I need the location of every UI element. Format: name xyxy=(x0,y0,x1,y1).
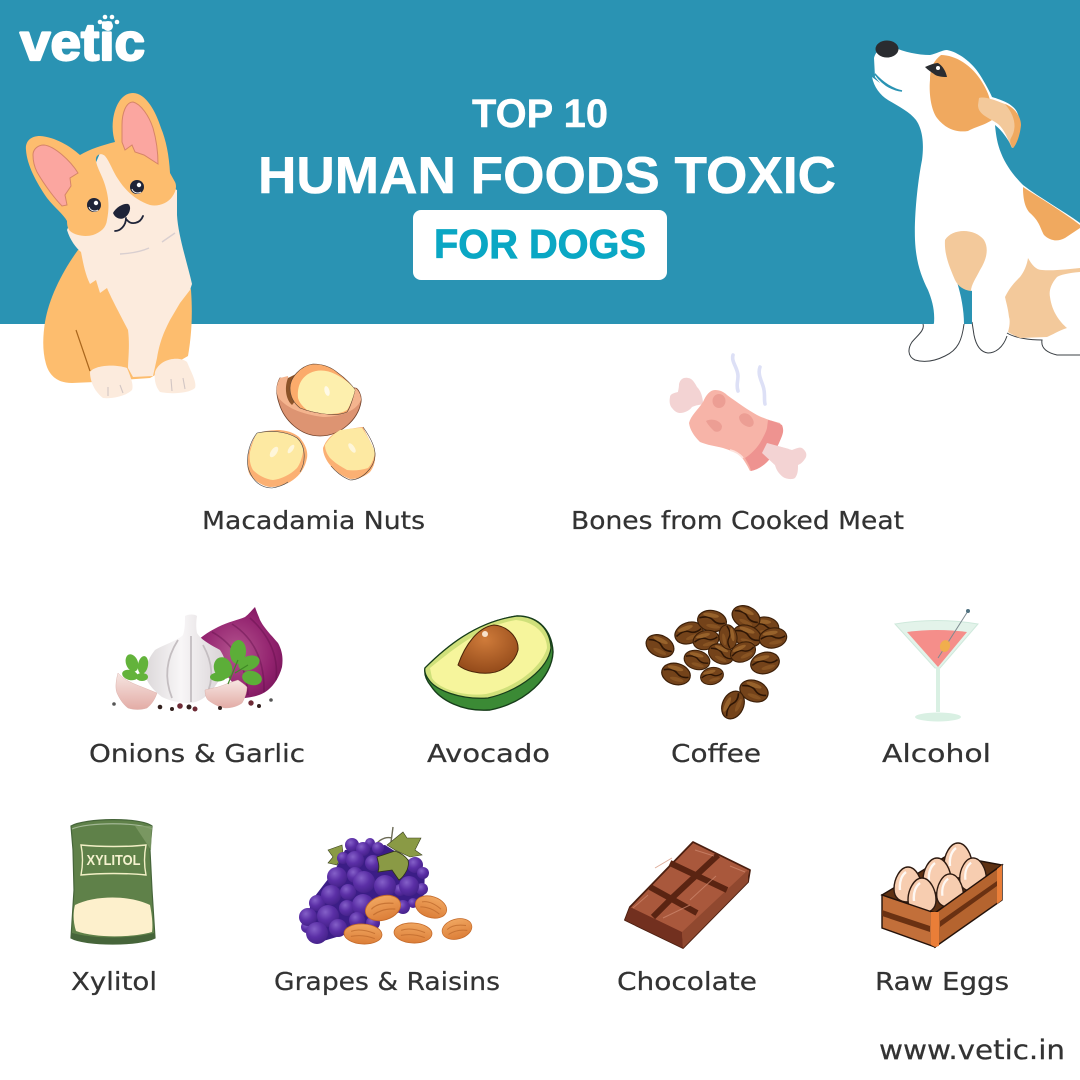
garlic cloves xyxy=(116,673,157,710)
powder window xyxy=(74,898,152,936)
back leaves and stem xyxy=(377,827,393,843)
icon: paw xyxy=(98,15,119,31)
kernel in shell xyxy=(290,364,355,415)
food: onions and garlic xyxy=(112,607,283,712)
nose xyxy=(876,40,898,58)
illustration: corgi xyxy=(26,93,195,398)
front leaf xyxy=(377,851,408,880)
label: macadamia nuts: Macadamia Nuts xyxy=(202,506,425,535)
peppercorns xyxy=(112,698,273,712)
food: macadamia nuts xyxy=(247,364,375,488)
label: onions and garlic: Onions & Garlic xyxy=(89,739,305,768)
parsley left xyxy=(121,652,149,682)
label: grapes and raisins: Grapes & Raisins xyxy=(274,967,500,996)
front paws xyxy=(90,359,195,398)
left ear inner xyxy=(33,145,78,206)
right ear inner xyxy=(122,102,158,164)
mouth xyxy=(875,74,902,91)
eggs xyxy=(944,843,972,878)
label: coffee: Coffee xyxy=(671,739,761,768)
chocolate grooves xyxy=(650,855,727,917)
food: raw eggs crate xyxy=(882,843,1002,947)
bones xyxy=(670,378,703,413)
left nut xyxy=(247,430,307,487)
label: avocado: Avocado xyxy=(427,739,550,768)
meat xyxy=(689,390,783,471)
logo: vetic: vetic xyxy=(20,14,145,72)
food: avocado xyxy=(425,616,553,710)
food: chocolate bar xyxy=(625,842,750,948)
between-legs gap xyxy=(957,282,972,324)
avocado pit xyxy=(458,625,518,673)
meat cut end xyxy=(745,420,783,471)
garlic bulb xyxy=(145,614,225,703)
label: raw eggs: Raw Eggs xyxy=(875,967,1009,996)
red onion xyxy=(198,607,283,698)
food: grapes and raisins xyxy=(299,827,474,945)
title: HUMAN FOODS TOXIC xyxy=(258,147,836,205)
label: xylitol: Xylitol xyxy=(71,967,157,996)
nose and mouth xyxy=(113,204,143,231)
header band xyxy=(0,0,1080,324)
crate panels xyxy=(882,895,935,947)
label: alcohol: Alcohol xyxy=(882,739,991,768)
raisins xyxy=(362,891,404,925)
subtitle badge xyxy=(413,210,667,280)
ear xyxy=(978,97,1020,148)
right nut xyxy=(323,427,375,479)
grape cluster xyxy=(299,838,429,944)
website url: www.vetic.in xyxy=(879,1035,1065,1066)
title: TOP 10 xyxy=(472,92,608,136)
food: coffee beans xyxy=(642,601,788,723)
bowl shell xyxy=(277,378,361,436)
parsley right xyxy=(210,639,263,687)
back patch xyxy=(1023,187,1080,240)
food: alcohol martini xyxy=(895,609,978,722)
title xyxy=(258,92,836,280)
haunch patch xyxy=(1005,258,1080,338)
head patch xyxy=(930,55,992,131)
illustration: howling dog xyxy=(872,40,1080,361)
subtitle badge: FOR DOGS xyxy=(434,221,646,267)
bag label xyxy=(81,845,146,875)
crate interior xyxy=(882,855,1002,913)
eye xyxy=(925,63,947,77)
food: xylitol bag: XYLITOL xyxy=(86,852,140,869)
eyes xyxy=(87,180,144,212)
food: cooked meat bone xyxy=(670,355,806,479)
label: bones from cooked meat: Bones from Cooked Meat xyxy=(571,506,904,535)
olive pick xyxy=(938,611,968,658)
bag bottom band xyxy=(71,933,155,944)
label: chocolate: Chocolate xyxy=(617,967,757,996)
chest patch xyxy=(945,231,987,291)
steam xyxy=(733,355,765,404)
cluster shadow xyxy=(305,845,425,942)
food: xylitol bag xyxy=(71,820,155,944)
